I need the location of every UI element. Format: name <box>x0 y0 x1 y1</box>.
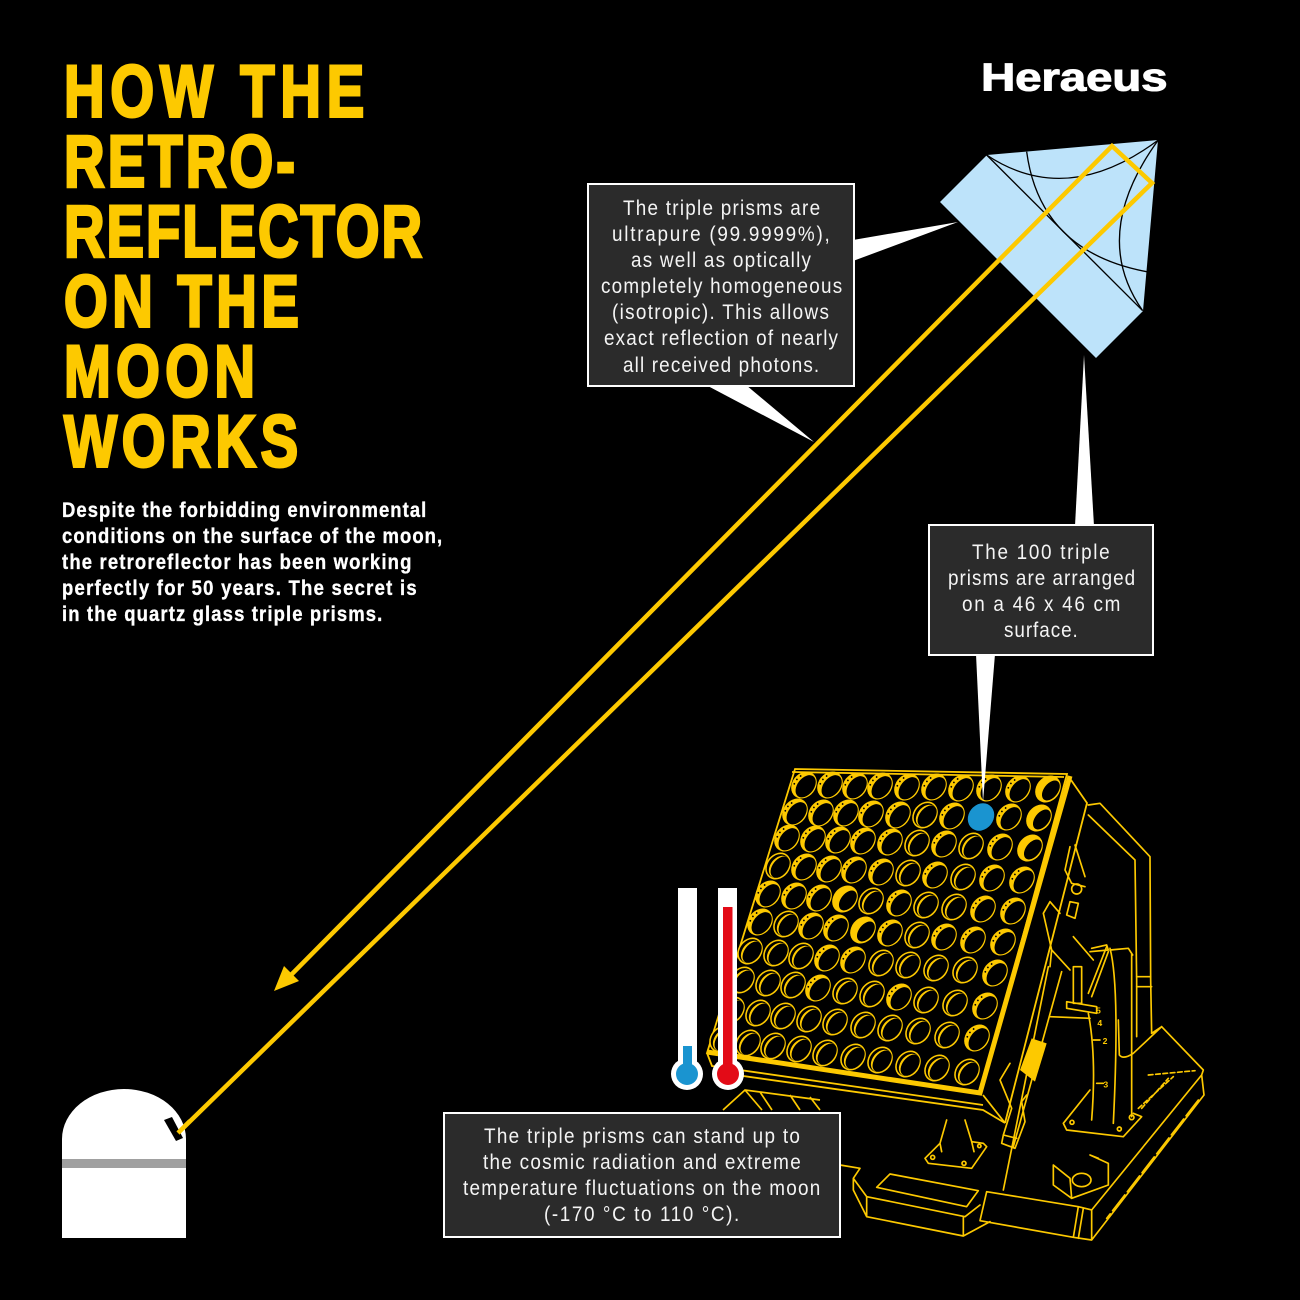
observatory <box>62 1089 190 1238</box>
scale numbers: 4 <box>1097 1018 1102 1028</box>
title: ON THE <box>64 260 299 342</box>
callout: purity: (isotropic). This allows <box>612 301 829 324</box>
scale numbers: 3 <box>1103 1079 1108 1089</box>
callout: arrangement: The 100 triple <box>972 541 1110 564</box>
callout: temperature: (-170 °C to 110 °C). <box>544 1203 739 1226</box>
callout: arrangement: surface. <box>1004 619 1078 642</box>
callout: temperature <box>444 1113 840 1237</box>
callout: purity: completely homogeneous <box>601 275 842 298</box>
intro text: in the quartz glass triple prisms. <box>62 603 382 626</box>
reflector apparatus <box>704 766 1204 1240</box>
callout: purity: all received photons. <box>623 354 819 377</box>
title: HOW THE <box>64 50 364 132</box>
scale numbers: 5 <box>1096 1005 1101 1015</box>
left struts <box>723 1090 820 1110</box>
callout: purity: exact reflection of nearly <box>604 327 838 350</box>
title: REFLECTOR <box>64 190 422 272</box>
thermometer: hot <box>712 888 744 1090</box>
highlighted prism <box>962 798 1000 836</box>
callout: purity: ultrapure (99.9999%), <box>612 223 830 246</box>
thermometer: cold <box>671 888 703 1090</box>
title: MOON <box>64 330 255 412</box>
arrow head <box>274 966 299 991</box>
scale numbers: 2 <box>1103 1036 1108 1046</box>
callout: arrangement <box>929 355 1153 802</box>
title: WORKS <box>64 400 298 482</box>
intro text: the retroreflector has been working <box>62 551 411 574</box>
callout: temperature: temperature fluctuations on the moon <box>463 1177 820 1200</box>
title: RETRO- <box>64 120 295 202</box>
callout: purity <box>588 184 958 442</box>
intro text: perfectly for 50 years. The secret is <box>62 577 417 600</box>
callout: purity: as well as optically <box>631 249 811 272</box>
callout: arrangement: on a 46 x 46 cm <box>962 593 1120 616</box>
panel frame <box>707 769 1087 1123</box>
callout: purity: The triple prisms are <box>623 197 820 220</box>
intro text <box>62 499 442 626</box>
callout: temperature: The triple prisms can stand up to <box>484 1125 800 1148</box>
title <box>64 50 422 482</box>
prism <box>940 140 1158 358</box>
callout: arrangement: prisms are arranged <box>948 567 1135 590</box>
scale numbers <box>1096 1005 1108 1089</box>
callout: temperature: the cosmic radiation and extreme <box>483 1151 801 1174</box>
logo: Heraeus: Heraeus <box>981 56 1168 99</box>
prism holes <box>704 766 1066 1091</box>
intro text: conditions on the surface of the moon, <box>62 525 442 548</box>
intro text: Despite the forbidding environmental <box>62 499 426 522</box>
support structure <box>840 803 1204 1240</box>
light beam <box>178 146 1152 1133</box>
